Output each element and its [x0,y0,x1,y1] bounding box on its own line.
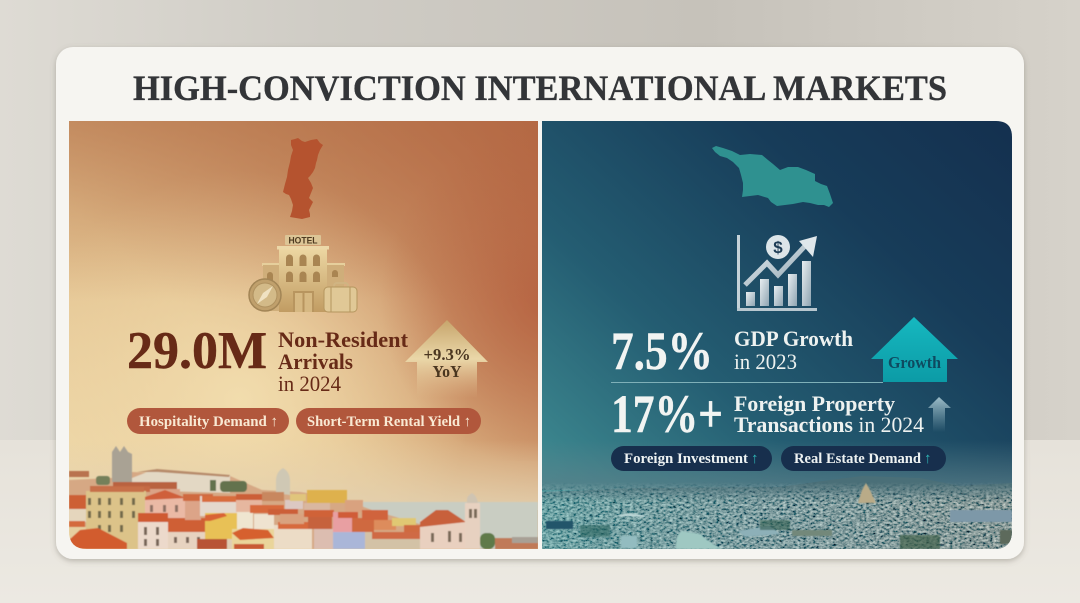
arrow: Growth: Growth [888,353,942,372]
arrow: +9.3% YoY: +9.3% [424,345,470,364]
arrow: small up [928,397,951,432]
pill: Foreign Investment [611,446,772,471]
stat label: Foreign Property Transactions in 2024: Foreign Property [734,391,895,416]
panel: Georgia [542,121,1012,549]
background: wall [0,0,1080,440]
pill: Real Estate Demand: ↑ [924,451,932,467]
cityscape: Lisbon [69,446,538,549]
stat: 7.5%: 7.5% [611,321,713,381]
title: HIGH-CONVICTION INTERNATIONAL MARKETS [133,68,947,108]
arrow: +9.3% YoY: YoY [432,362,462,381]
panel: Portugal [69,121,538,549]
arrow: +9.3% YoY [405,320,488,398]
icon: growth chart with dollar coin: $ [773,238,783,257]
divider [611,382,883,383]
stat label: Non-Resident Arrivals in 2024: Non-Resident [278,327,409,352]
icon: growth chart with dollar coin [737,235,817,311]
stat label: Non-Resident Arrivals in 2024: Arrivals [278,349,353,374]
stat label: Foreign Property Transactions in 2024: Transactions in 2024 [734,412,924,437]
pill: Foreign Investment: ↑ [751,451,758,467]
stat: 17%+: 17%+ [611,384,723,444]
icon: hotel with compass and suitcase [249,235,357,312]
pill: Short-Term Rental Yield [296,408,481,434]
panel background [69,121,538,549]
arrow: Growth [871,317,958,382]
stat label: Foreign Property Transactions in 2024 [734,391,924,437]
stat label: Non-Resident Arrivals in 2024: in 2024 [278,371,341,396]
stat label: GDP Growth in 2023 [734,326,853,374]
pill: Short-Term Rental Yield: Short-Term Rental Yield ↑ [307,414,471,430]
pill: Real Estate Demand [781,446,946,471]
pill: Real Estate Demand: Real Estate Demand [794,451,922,467]
white card [56,47,1024,559]
stat: 29.0M: 29.0M [127,322,267,380]
stat label: GDP Growth in 2023: GDP Growth [734,326,853,351]
cityscape: Tbilisi [542,476,1012,549]
pill: Hospitality Demand [127,408,289,434]
pill: Hospitality Demand: Hospitality Demand ↑ [139,414,278,430]
stat label: GDP Growth in 2023: in 2023 [734,349,797,374]
pill: Foreign Investment: Foreign Investment [624,451,748,467]
map: Portugal [283,138,323,219]
map: Georgia [712,146,833,207]
icon: hotel with compass and suitcase: HOTEL [288,236,318,246]
stat label: Non-Resident Arrivals in 2024 [278,327,409,396]
panel background [542,121,1012,549]
background: table surface [0,440,1080,603]
